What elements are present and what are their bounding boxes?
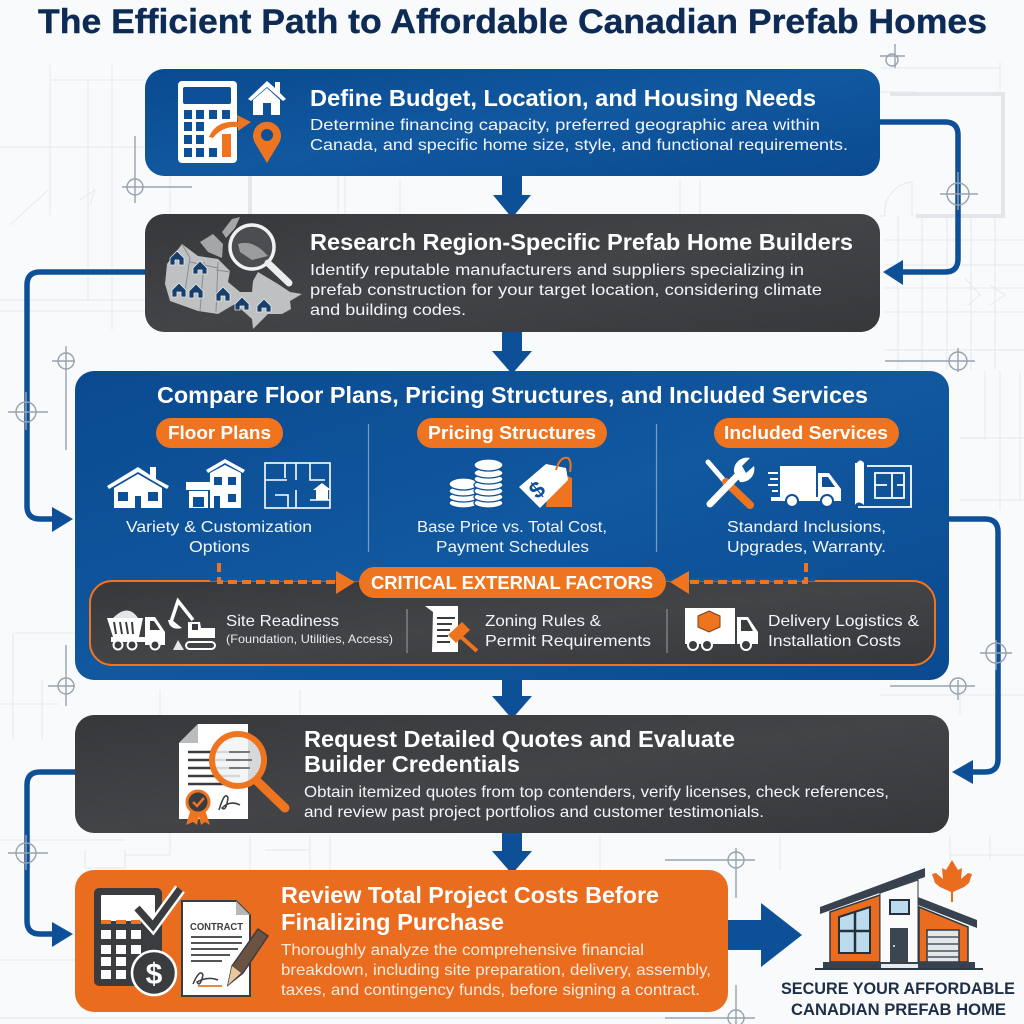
caption: Base Price vs. Total Cost, bbox=[417, 519, 607, 536]
heading bbox=[281, 882, 659, 935]
title: The Efficient Path to Affordable Canadian Prefab Homes bbox=[38, 3, 987, 41]
heading: Builder Credentials bbox=[304, 751, 520, 777]
arrow: down flow 4 bbox=[492, 829, 532, 874]
icon: delivery truck bbox=[685, 608, 758, 650]
icon: document with magnifier and seal bbox=[179, 724, 285, 825]
caption: Standard Inclusions, bbox=[727, 519, 886, 536]
connector arrows: side flow bbox=[27, 122, 998, 947]
arrow: dashed right bbox=[670, 563, 806, 594]
icon: permit scroll and gavel bbox=[425, 606, 477, 652]
icon: two-storey house bbox=[186, 459, 245, 508]
body text: prefab construction for your target location, considering climate bbox=[310, 282, 822, 299]
closing text: SECURE YOUR AFFORDABLE bbox=[781, 980, 1015, 998]
arrow: down flow 1 bbox=[493, 170, 531, 218]
text: zoning bbox=[485, 613, 651, 650]
icon: Canada map with magnifier bbox=[165, 217, 302, 329]
heading: Finalizing Purchase bbox=[281, 909, 504, 935]
arrow: dashed left bbox=[219, 563, 355, 594]
arrow: down flow 2 bbox=[492, 328, 532, 374]
text: delivery: Delivery Logistics & bbox=[768, 613, 919, 630]
mask: band above panel for dashed links bbox=[210, 578, 815, 582]
arrow: down flow 3 bbox=[492, 676, 532, 719]
text: zoning: Permit Requirements bbox=[485, 633, 651, 650]
body text: and building codes. bbox=[310, 302, 466, 319]
icon: calculator, check and dollar bbox=[94, 888, 180, 995]
hatch walls bbox=[250, 94, 1003, 216]
icon: maple leaf bbox=[932, 860, 972, 902]
text: site readiness: (Foundation, Utilities, Access) bbox=[226, 632, 393, 646]
icon: coins bbox=[449, 459, 503, 508]
icon: calculator, check and dollar: $ bbox=[146, 958, 163, 991]
pill: critical external factors: CRITICAL EXTERNAL FACTORS bbox=[371, 572, 653, 593]
arrow: step 1 to step 2 bbox=[880, 122, 958, 285]
panel dividers bbox=[407, 609, 667, 653]
caption: Payment Schedules bbox=[436, 539, 589, 556]
closing text: CANADIAN PREFAB HOME bbox=[791, 1001, 1006, 1019]
column: services bbox=[708, 418, 911, 556]
heading: Research Region-Specific Prefab Home Builders bbox=[310, 229, 853, 255]
column: floor plans bbox=[107, 418, 331, 556]
icon: blueprint bbox=[855, 460, 911, 507]
closing text bbox=[781, 980, 1015, 1019]
text: zoning: Zoning Rules & bbox=[485, 613, 601, 630]
body text bbox=[281, 942, 711, 999]
body text: Determine financing capacity, preferred geographic area within bbox=[310, 117, 820, 134]
caption: Upgrades, Warranty. bbox=[727, 539, 886, 556]
icon: contract and pen bbox=[182, 901, 268, 996]
arrow: step 2 to step 3 bbox=[27, 272, 145, 532]
caption bbox=[417, 519, 607, 556]
text: delivery: Installation Costs bbox=[768, 633, 901, 650]
icon: contract and pen: CONTRACT bbox=[190, 921, 244, 933]
text: site readiness bbox=[226, 613, 393, 646]
panel: step 1 define budget bbox=[145, 69, 880, 176]
icon: tools bbox=[708, 458, 754, 505]
icon: price tag: $ bbox=[524, 475, 550, 504]
arrow: step 4 to step 5 bbox=[27, 772, 75, 947]
pill: included services bbox=[714, 418, 899, 448]
body text bbox=[310, 117, 848, 154]
caption bbox=[727, 519, 886, 556]
body text: Identify reputable manufacturers and suppliers specializing in bbox=[310, 262, 804, 279]
icon: calculator house and pin bbox=[178, 81, 286, 163]
pill: pricing structures: Pricing Structures bbox=[428, 423, 596, 443]
column: pricing bbox=[417, 418, 607, 556]
body text: Thoroughly analyze the comprehensive financial bbox=[281, 942, 644, 959]
caption bbox=[126, 519, 312, 556]
icon: single house bbox=[107, 467, 169, 508]
icon: floor plan bbox=[265, 463, 331, 508]
body text: taxes, and contingency funds, before signing a contract. bbox=[281, 982, 700, 999]
arrow: step 3 to step 4 bbox=[949, 519, 998, 784]
body text bbox=[310, 262, 822, 319]
heading: Request Detailed Quotes and Evaluate bbox=[304, 726, 735, 752]
icon: dump truck and excavator bbox=[107, 601, 215, 650]
pill: included services: Included Services bbox=[724, 423, 888, 443]
text: site readiness: Site Readiness bbox=[226, 613, 339, 630]
caption: Variety & Customization bbox=[126, 519, 312, 536]
panel: step 2 research bbox=[145, 214, 880, 332]
pill: floor plans bbox=[156, 418, 283, 448]
icon: finished prefab home bbox=[815, 860, 983, 970]
pill: pricing structures bbox=[417, 418, 607, 448]
body text: and review past project portfolios and customer testimonials. bbox=[304, 804, 764, 821]
text: delivery bbox=[768, 613, 919, 650]
heading: Review Total Project Costs Before bbox=[281, 882, 659, 908]
panel: step 3 compare bbox=[75, 371, 949, 680]
icon: price tag bbox=[519, 458, 572, 508]
body text: Canada, and specific home size, style, and functional requirements. bbox=[310, 137, 848, 154]
pill: critical external factors bbox=[359, 567, 666, 598]
panel: step 5 review costs bbox=[75, 870, 728, 1012]
arrow: big arrow to final home bbox=[728, 903, 802, 967]
body text: Obtain itemized quotes from top contenders, verify licenses, check references, bbox=[304, 784, 889, 801]
heading: Compare Floor Plans, Pricing Structures, and Included Services bbox=[157, 382, 868, 408]
caption: Options bbox=[189, 539, 250, 556]
panel: step 4 request quotes bbox=[75, 715, 949, 833]
panel: critical external factors bbox=[90, 563, 935, 665]
body text: breakdown, including site preparation, delivery, assembly, bbox=[281, 962, 711, 979]
pill: floor plans: Floor Plans bbox=[168, 423, 271, 443]
heading: Define Budget, Location, and Housing Needs bbox=[310, 85, 816, 111]
body text bbox=[304, 784, 889, 821]
column dividers bbox=[368, 424, 656, 552]
icon: moving truck bbox=[768, 466, 841, 507]
heading bbox=[304, 726, 735, 777]
